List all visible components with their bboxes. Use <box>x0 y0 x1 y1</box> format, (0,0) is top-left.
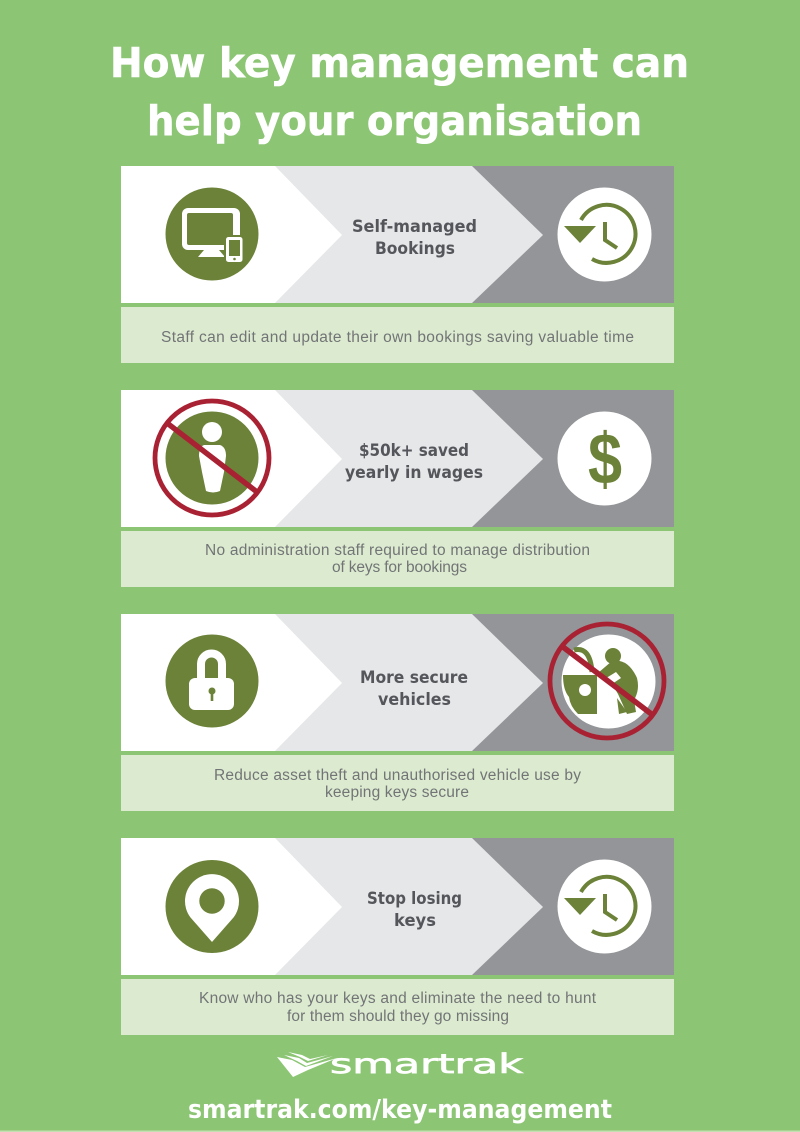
title: How key management can <box>110 39 689 87</box>
logo: smartrak <box>277 1049 524 1080</box>
icon: location pin <box>166 860 258 953</box>
panel: secure vehicles <box>121 614 674 811</box>
description: Reduce asset theft and unauthorised vehicle use by <box>214 767 581 784</box>
heading: Self-managed <box>352 217 477 237</box>
icon: logo chevrons <box>277 1052 337 1077</box>
description <box>121 979 674 1035</box>
logo: smartrak: smartrak <box>330 1049 524 1080</box>
description: Know who has your keys and eliminate the need to hunt <box>199 990 597 1007</box>
heading: More secure <box>360 668 468 688</box>
heading: keys <box>394 911 436 931</box>
icon: monitor and tablet <box>166 188 258 280</box>
chevron band <box>121 838 674 975</box>
description: of keys for bookings <box>332 559 467 576</box>
heading: $50k+ saved <box>359 441 469 461</box>
heading <box>360 668 468 710</box>
description: No administration staff required to manage distribution <box>205 542 590 559</box>
heading <box>352 217 477 259</box>
heading: vehicles <box>378 690 451 710</box>
icon: no staff <box>155 401 269 515</box>
icon: padlock <box>166 634 258 728</box>
panel: stop losing keys <box>121 838 674 1035</box>
heading: Bookings <box>375 239 455 259</box>
heading: Stop losing <box>367 889 462 909</box>
title: help your organisation <box>147 97 642 145</box>
title <box>110 39 689 145</box>
website url: smartrak.com/key-management <box>188 1095 612 1125</box>
description: for them should they go missing <box>287 1008 509 1025</box>
panel: self-managed bookings <box>121 166 674 363</box>
heading <box>345 441 483 483</box>
description: keeping keys secure <box>325 784 469 801</box>
heading: yearly in wages <box>345 463 483 483</box>
heading <box>367 889 462 931</box>
icon: dollar sign <box>558 412 652 506</box>
icon: no vehicle theft <box>550 624 664 738</box>
description <box>121 755 674 811</box>
description <box>121 307 674 363</box>
panel: wages saved <box>121 390 674 587</box>
chevron band <box>121 390 674 527</box>
icon: clock history <box>558 188 652 282</box>
chevron band <box>121 614 674 751</box>
description: Staff can edit and update their own bookings saving valuable time <box>161 329 634 346</box>
icon: clock history <box>558 860 652 954</box>
description <box>121 531 674 587</box>
chevron band <box>121 166 674 303</box>
icon: dollar sign: $ <box>588 420 622 500</box>
